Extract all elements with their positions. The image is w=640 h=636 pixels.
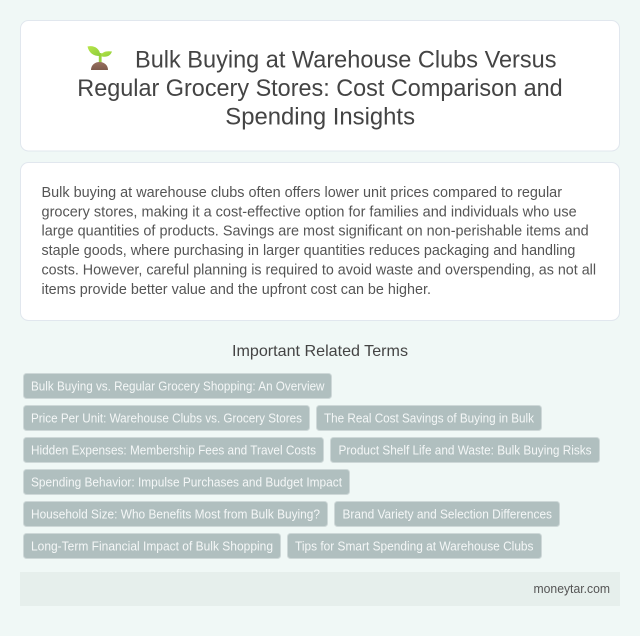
chip: real cost savings: The Real Cost Savings of Buying in Bulk [324, 410, 535, 425]
chip: smart spending tips: Tips for Smart Spending at Warehouse Clubs [295, 538, 534, 553]
related terms chips [24, 374, 600, 558]
chip: shelf life: Product Shelf Life and Waste: Bulk Buying Risks [338, 442, 592, 457]
chip: overview [24, 374, 332, 398]
chip: household size: Household Size: Who Benefits Most from Bulk Buying? [31, 506, 320, 521]
title: Bulk Buying at Warehouse Clubs Versus [135, 46, 556, 74]
paragraph text: grocery stores, making it a cost-effective option for families and individuals who use [42, 204, 577, 220]
title: Regular Grocery Stores: Cost Comparison and [77, 75, 563, 102]
panel: summary paragraph [20, 162, 620, 320]
chip: hidden expenses: Hidden Expenses: Membership Fees and Travel Costs [31, 442, 316, 457]
chip: overview: Bulk Buying vs. Regular Grocery Shopping: An Overview [31, 378, 325, 393]
chip: price per unit [24, 406, 310, 430]
panel: title header [20, 20, 620, 151]
chip: hidden expenses [24, 438, 324, 462]
footer source text: moneytar.com [534, 582, 610, 596]
chip: spending behavior [24, 470, 350, 494]
chip: household size [24, 502, 328, 526]
title: Spending Insights [225, 104, 415, 131]
paragraph text: Bulk buying at warehouse clubs often offers lower unit prices compared to regular [42, 185, 562, 201]
chip: long-term impact [24, 534, 280, 558]
chip: price per unit: Price Per Unit: Warehouse Clubs vs. Grocery Stores [31, 410, 302, 425]
chip: brand variety: Brand Variety and Selection Differences [342, 506, 552, 521]
paragraph text: large quantities of products. Savings are most significant on non-perishable items and [42, 224, 589, 240]
paragraph text: staple goods, where purchasing in larger quantities reduces packaging and handling [42, 243, 575, 259]
chip: long-term impact: Long-Term Financial Impact of Bulk Shopping [31, 538, 273, 553]
icon: seedling [88, 46, 112, 70]
chip: spending behavior: Spending Behavior: Impulse Purchases and Budget Impact [31, 474, 342, 489]
paragraph text [42, 185, 596, 298]
chip: smart spending tips [288, 534, 542, 558]
heading: important related terms: Important Related Terms [232, 343, 408, 360]
chip: real cost savings [316, 406, 542, 430]
paragraph text: items provide better value and the upfront cost can be higher. [42, 282, 431, 298]
chip: shelf life [330, 438, 600, 462]
footer [20, 572, 620, 606]
title [77, 46, 563, 131]
chip: brand variety [334, 502, 560, 526]
paragraph text: costs. However, careful planning is required to avoid waste and overspending, as not all [42, 262, 596, 278]
